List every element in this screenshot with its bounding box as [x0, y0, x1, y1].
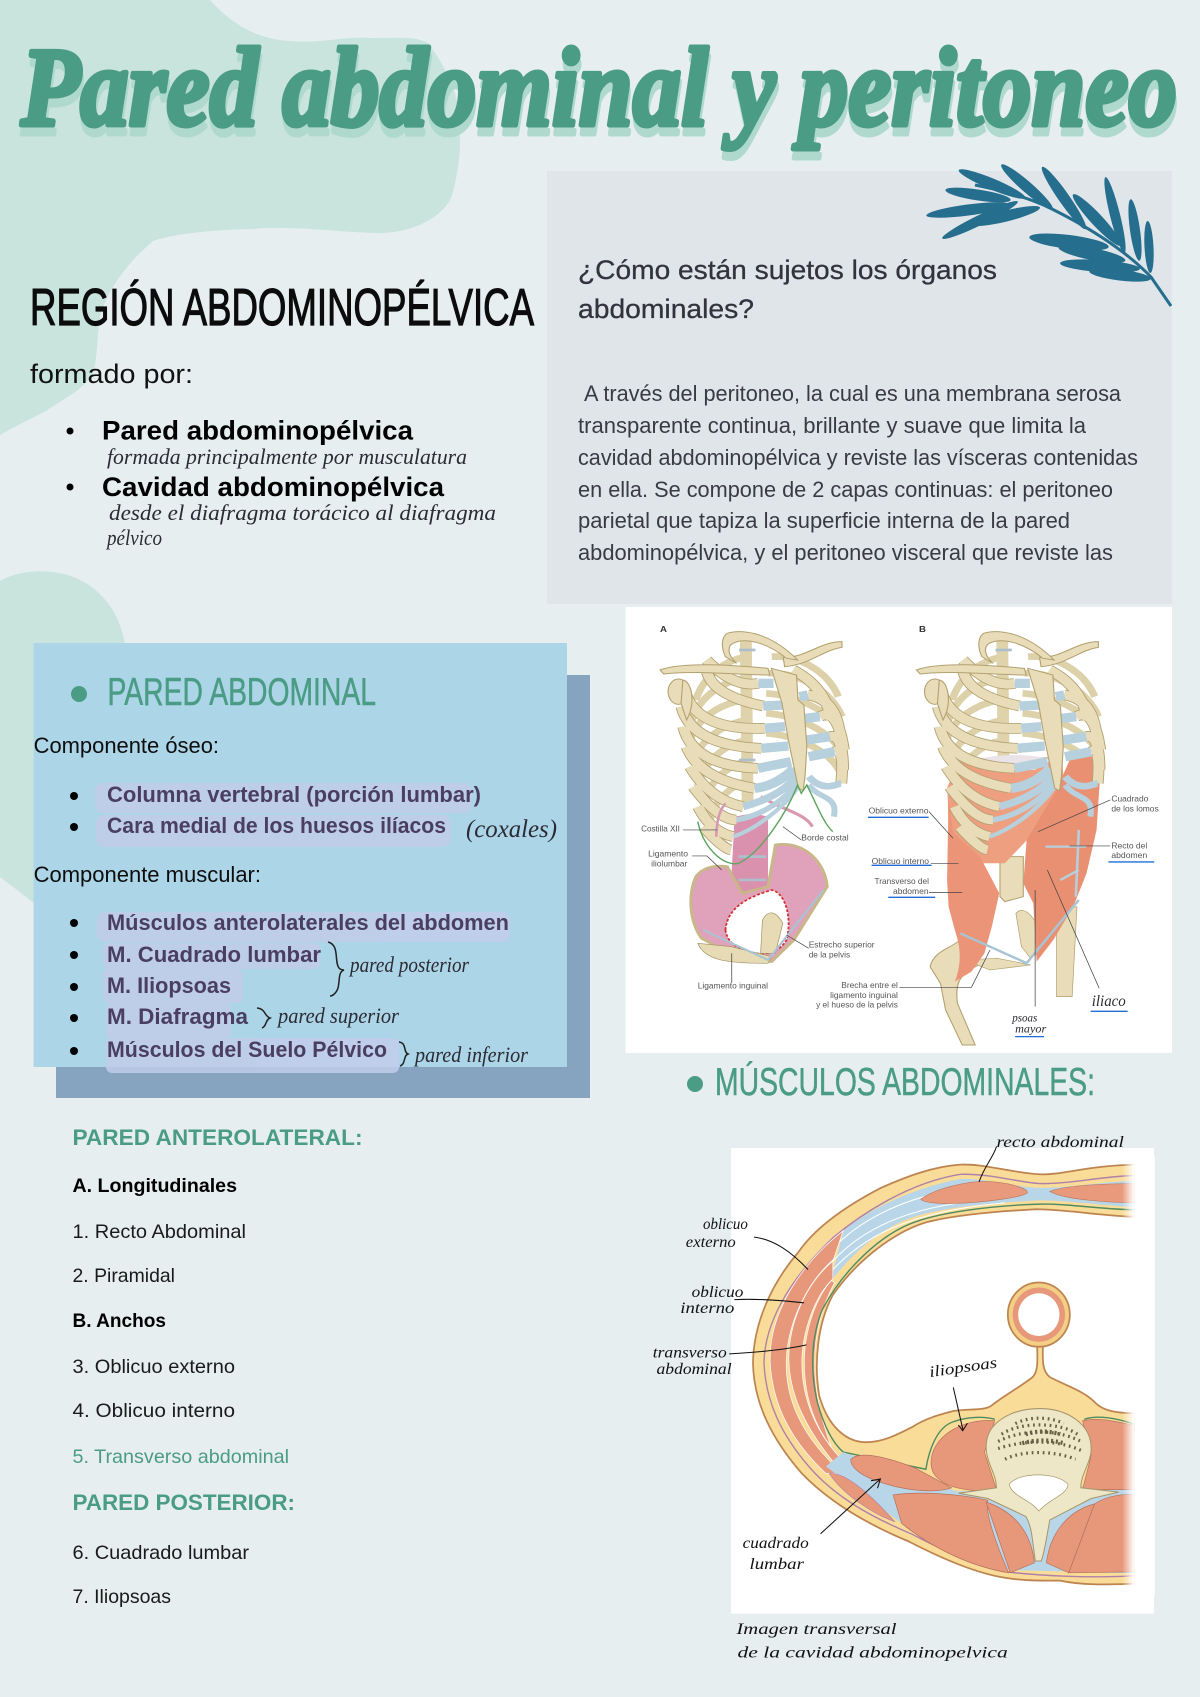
- list: parts of the abdominopelvic region: [66, 416, 496, 550]
- illustration: transverse section of the abdominal cavity: cuadrado: [743, 1535, 809, 1552]
- panel: pared abdominal: M. Iliopsoas: [107, 973, 231, 998]
- illustration: transverse section of the abdominal cavity: de la cavidad abdominopelvica: [737, 1644, 1008, 1662]
- handwritten notes: pared inferior: [413, 1042, 528, 1067]
- figure B: rib cage with muscles: [916, 624, 1100, 1045]
- text list: pared anterolateral y posterior: [72, 1125, 362, 1608]
- handwritten notes: pared posterior: [348, 952, 469, 977]
- illustration: transverse section of the abdominal cavity: abdominal: [657, 1361, 732, 1378]
- list: parts of the abdominopelvic region: Pared abdominopélvica: [102, 416, 414, 446]
- panel heading: ¿Cómo están sujetos los órganos: [578, 255, 997, 285]
- illustration: abdominal wall anatomy: Oblicuo externo: [869, 806, 929, 815]
- highlights: [95, 783, 510, 1073]
- illustration: abdominal wall anatomy: iliaco: [1092, 992, 1126, 1010]
- panel heading: abdominales?: [578, 294, 754, 324]
- handwritten labels and arrows: [730, 1147, 996, 1534]
- blue fascia at the back: [826, 1452, 1143, 1574]
- illustration: transverse section of the abdominal cavity: interno: [680, 1300, 735, 1317]
- panel body text: [578, 381, 1138, 565]
- heading: región abdominopélvica: REGIÓN ABDOMINOPÉLVICA: [30, 279, 534, 337]
- background blob: middle left: [0, 571, 200, 903]
- illustration: abdominal wall anatomy: Ligamento inguinal: [698, 981, 768, 990]
- panel: pared abdominal: PARED ABDOMINAL: [108, 671, 376, 714]
- panel: pared abdominal: Músculos del Suelo Pélvico: [107, 1037, 387, 1062]
- panel body text: parietal que tapiza la superficie interna de la pared: [578, 508, 1070, 533]
- panel body text: abdominopélvica, y el peritoneo visceral que reviste las: [578, 540, 1113, 565]
- illustration: transverse section of the abdominal cavity: recto abdominal: [996, 1134, 1124, 1151]
- text list: pared anterolateral y posterior: A. Longitudinales: [72, 1175, 237, 1197]
- text list: pared anterolateral y posterior: 1. Recto Abdominal: [72, 1221, 246, 1243]
- panel: pared abdominal: Músculos anterolaterales del abdomen: [107, 910, 509, 935]
- panel: pared abdominal: M. Cuadrado lumbar: [107, 942, 321, 967]
- handwritten notes: pared superior: [276, 1003, 399, 1028]
- figure B: rib cage with muscles: B: [919, 624, 926, 634]
- panel: pared abdominal: Columna vertebral (porción lumbar): [107, 782, 481, 807]
- illustration: abdominal wall anatomy: Cuadrado: [1111, 794, 1148, 803]
- bone component: Componente óseo:: [34, 733, 219, 758]
- list: parts of the abdominopelvic region: Cavidad abdominopélvica: [102, 472, 445, 502]
- text list: pared anterolateral y posterior: 2. Piramidal: [72, 1265, 175, 1287]
- anatomy labels and leader lines: [683, 800, 1110, 1007]
- illustration: abdominal wall anatomy: Ligamento: [648, 849, 688, 859]
- edge fade: [1122, 1156, 1134, 1595]
- text list: pared anterolateral y posterior: 7. Iliopsoas: [72, 1586, 171, 1608]
- illustration: transverse section of the abdominal cavity: Imagen transversal: [735, 1621, 897, 1638]
- vertebra: [959, 1409, 1119, 1561]
- pelvis: [691, 844, 827, 962]
- panel heading: [71, 686, 87, 702]
- illustration: transverse section of the abdominal cavity: lumbar: [750, 1556, 805, 1573]
- illustration: abdominal wall anatomy: [626, 607, 1172, 1053]
- body wall fat layer: [753, 1165, 1143, 1584]
- illustration: abdominal wall anatomy: iliolumbar: [651, 859, 687, 869]
- panel heading: [578, 255, 997, 324]
- panel: pared abdominal: Cara medial de los huesos ilíacos: [107, 813, 446, 838]
- handwritten notes: (coxales): [466, 816, 557, 843]
- text list: pared anterolateral y posterior: PARED POSTERIOR:: [72, 1490, 295, 1515]
- oblique muscles: [770, 1231, 843, 1474]
- illustration: abdominal wall anatomy: Brecha entre el: [841, 980, 898, 990]
- panel: how organs are held: [547, 161, 1172, 604]
- text list: pared anterolateral y posterior: PARED ANTEROLATERAL:: [72, 1125, 362, 1150]
- panel body text: cavidad abdominopélvica y reviste las vísceras contenidas: [578, 445, 1138, 470]
- illustration: abdominal wall anatomy: de la pelvis: [809, 950, 851, 959]
- illustration: abdominal wall anatomy: Transverso del: [875, 876, 929, 886]
- inner fat and cavity: [815, 1205, 1143, 1470]
- illustration: transverse section of the abdominal cavity: oblicuo: [703, 1216, 748, 1233]
- panel: pared abdominal: [34, 643, 590, 1098]
- illustration: abdominal wall anatomy: de los lomos: [1111, 804, 1159, 813]
- illustration: abdominal wall anatomy: mayor: [1015, 1022, 1047, 1035]
- back muscles: [829, 1473, 895, 1522]
- text list: pared anterolateral y posterior: 5. Transverso abdominal: [72, 1446, 289, 1468]
- muscle component: Componente muscular:: [34, 862, 261, 887]
- illustration: abdominal wall anatomy: abdomen: [1111, 850, 1147, 860]
- illustration: abdominal wall anatomy: Recto del: [1111, 841, 1147, 850]
- list: parts of the abdominopelvic region: formada principalmente por musculatura: [107, 444, 467, 469]
- panel body text: en ella. Se compone de 2 capas continuas: el peritoneo: [578, 477, 1113, 502]
- panel body text: A través del peritoneo, la cual es una membrana serosa: [584, 381, 1122, 406]
- figure A: rib cage and pelvis: A: [660, 624, 667, 634]
- text list: pared anterolateral y posterior: 6. Cuadrado lumbar: [72, 1542, 250, 1564]
- illustration: transverse section of the abdominal cavity: iliopsoas: [928, 1354, 998, 1381]
- illustration: transverse section of the abdominal cavity: transverso: [653, 1344, 727, 1362]
- text: formado por: formado por:: [30, 359, 193, 389]
- muscles: [947, 757, 1064, 863]
- text list: pared anterolateral y posterior: 4. Oblicuo interno: [72, 1400, 235, 1422]
- illustration: transverse section of the abdominal cavity: oblicuo: [692, 1284, 744, 1301]
- background blob: top left: [0, 0, 460, 435]
- panel: pared abdominal: M. Diafragma: [107, 1004, 249, 1029]
- handwritten notes: [257, 816, 557, 1067]
- text list: pared anterolateral y posterior: 3. Oblicuo externo: [72, 1356, 235, 1378]
- illustration: transverse section of the abdominal cavity: externo: [686, 1234, 736, 1251]
- illustration: abdominal wall anatomy: Costilla XII: [641, 824, 680, 834]
- rectus muscles: [921, 1181, 1027, 1204]
- illustration: abdominal wall anatomy: Estrecho superior: [809, 940, 875, 949]
- legs: [930, 938, 983, 1045]
- blue underlines: [868, 817, 1154, 1037]
- illustration: abdominal wall anatomy: abdomen: [893, 886, 929, 896]
- panel body text: transparente continua, brillante y suave que limita la: [578, 413, 1087, 438]
- list: parts of the abdominopelvic region: desde el diafragma torácico al diafragma: [109, 500, 496, 525]
- icon: leaf branch: [926, 161, 1171, 306]
- figure A: rib cage and pelvis: [660, 624, 844, 963]
- illustration: abdominal wall anatomy: y el hueso de la pelvis: [816, 1000, 898, 1010]
- text list: pared anterolateral y posterior: B. Anchos: [72, 1310, 166, 1332]
- aorta-like tube: [1008, 1282, 1070, 1347]
- illustration: abdominal wall anatomy: Oblicuo interno: [872, 856, 929, 866]
- illustration: transverse section of the abdominal cavity: [653, 1134, 1155, 1662]
- aponeurosis: [831, 1179, 1143, 1281]
- illustration: abdominal wall anatomy: psoas: [1011, 1011, 1038, 1024]
- illustration: abdominal wall anatomy: Borde costal: [801, 833, 849, 843]
- list: parts of the abdominopelvic region: pélvico: [105, 525, 162, 550]
- illustration: abdominal wall anatomy: ligamento inguinal: [830, 990, 898, 1000]
